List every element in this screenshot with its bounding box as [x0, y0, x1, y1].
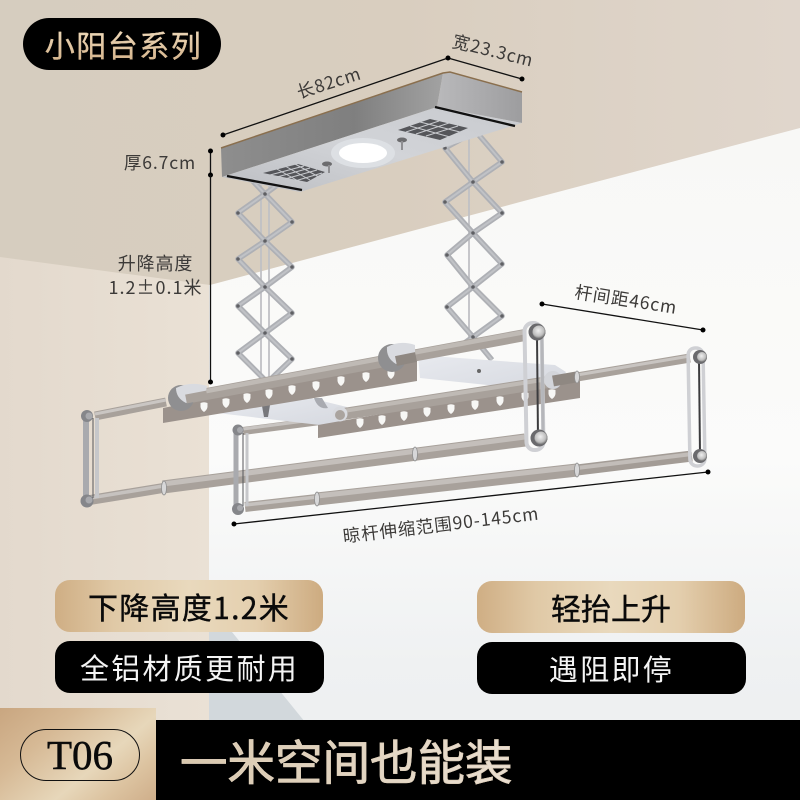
model tile [0, 708, 156, 800]
end frame: back left [232, 424, 247, 515]
dimension: lift height: 升降高度 [118, 250, 193, 276]
end frame: front right [524, 323, 548, 450]
dimension: rod spacing [540, 279, 706, 332]
front lower rod [90, 437, 525, 500]
ceiling box: long side [221, 73, 443, 177]
cable: right [468, 125, 470, 345]
feature pill: obstacle stop: 遇阻即停 [549, 647, 674, 689]
background: left wall [0, 250, 209, 730]
feature pill: lowering height [55, 580, 323, 632]
series badge: 小阳台系列 [45, 22, 202, 66]
bottom bar [156, 720, 800, 800]
bracket cap: back left [332, 406, 348, 422]
background: distant mountain [208, 632, 305, 722]
feature pill: easy lift: 轻抬上升 [551, 585, 671, 629]
dimension: lift height: 1.2±0.1米 [109, 274, 202, 300]
feature pill: aluminium: 全铝材质更耐用 [80, 646, 299, 688]
background: ceiling [0, 0, 800, 285]
center bracket: right [418, 355, 566, 392]
scissor lift: right [443, 113, 504, 360]
thin rod: back right [577, 358, 690, 377]
end frame: front left [80, 410, 97, 508]
ceiling box: top rim [221, 72, 522, 148]
ceiling box: short side [437, 72, 522, 123]
model number pill [20, 729, 140, 781]
dimension: length: 长82cm [293, 61, 364, 104]
back lower rod [245, 454, 692, 507]
ceiling box [221, 72, 522, 192]
bracket cap: back right [544, 371, 576, 389]
bracket cap: front right [378, 343, 416, 372]
dimension: thickness [124, 148, 213, 178]
vent: right [398, 119, 468, 140]
feature pill: obstacle stop [477, 642, 746, 694]
sensors [322, 138, 407, 173]
feature pill: lowering height: 下降高度1.2米 [88, 584, 290, 628]
dimension: rod extension: 晾杆伸缩范围90-145cm [341, 501, 540, 548]
dimension: length [220, 58, 448, 138]
dimension: thickness: 厚6.7cm [124, 150, 196, 175]
vent: left [263, 164, 325, 182]
bracket cap: front left [168, 384, 207, 411]
series badge [23, 18, 221, 70]
cables: left [261, 185, 269, 378]
background: window [200, 120, 800, 800]
end frame: back right [688, 348, 707, 466]
slogan: 一米空间也能装 [180, 725, 512, 794]
dimension: rod spacing: 杆间距46cm [573, 279, 679, 320]
feature pill: aluminium [55, 641, 324, 693]
dimension: lift height [109, 175, 213, 384]
scissor lift: left [236, 178, 294, 385]
feature pill: easy lift [477, 581, 745, 633]
ceiling box: dark end slots [227, 107, 515, 190]
center bracket: left [217, 398, 347, 427]
light panel [331, 138, 395, 168]
rail: front with holes [95, 332, 525, 423]
rail: back with holes [318, 356, 690, 438]
back rods: thin ends left [243, 419, 320, 431]
dimension: rod extension [232, 470, 710, 548]
ceiling box: underside [222, 107, 522, 192]
model number pill: T06 [47, 732, 113, 778]
dimension: width: 宽23.3cm [450, 28, 536, 73]
